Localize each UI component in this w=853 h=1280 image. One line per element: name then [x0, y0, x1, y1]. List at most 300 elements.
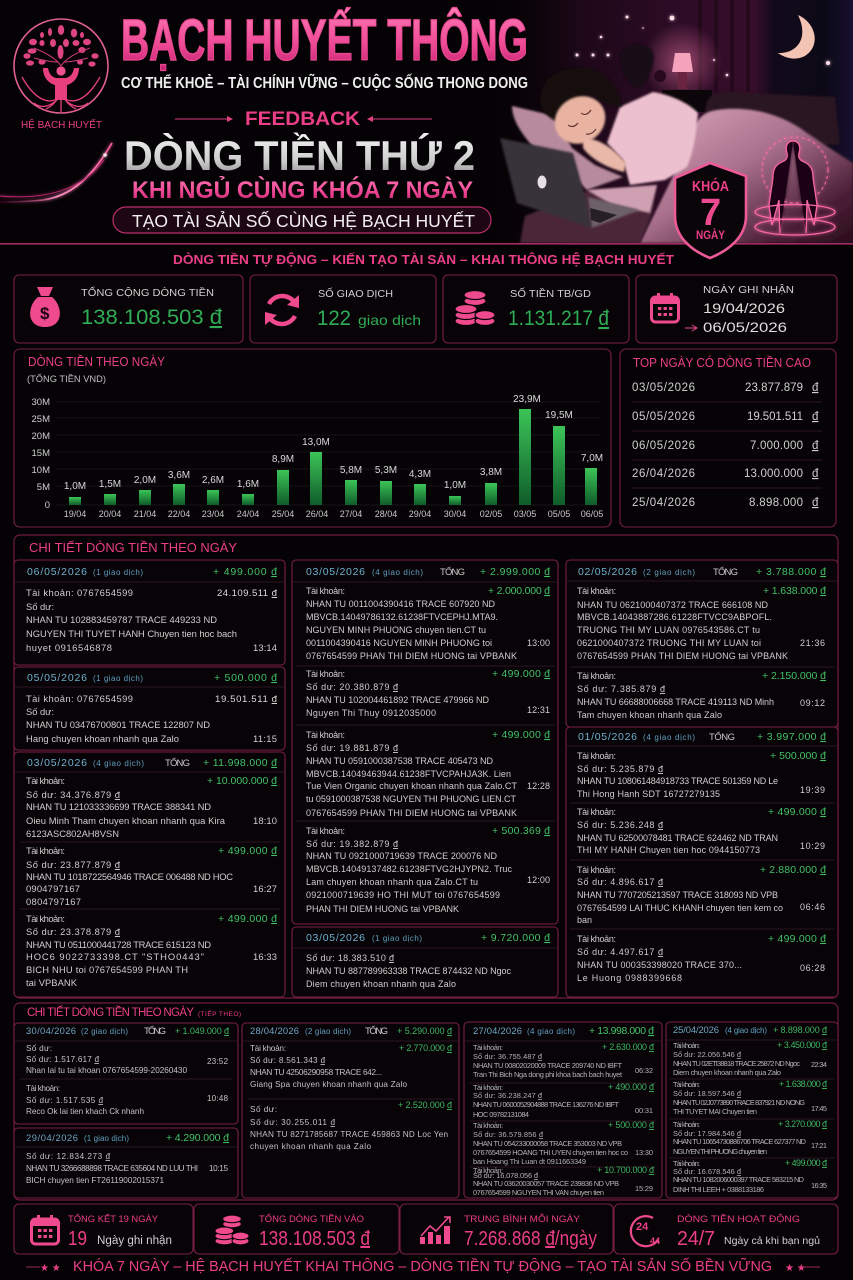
card: 28/04/2026: NHAN TU 8271785687 TRACE 459863 ND Loc Yen [250, 1130, 448, 1139]
badge: 7-day course: NGÀY [696, 227, 725, 242]
card: 02/05/2026: NHAN TU 0621000407372 TRACE 666108 ND [577, 600, 768, 610]
stat card: average per transaction: 1.131.217 đ [508, 307, 609, 330]
card: 28/04/2026: Tài khoản: [250, 1044, 286, 1053]
card: 06/05/2026: 06/05/2026 [27, 566, 87, 578]
panel heading: TOP NGÀY CÓ DÒNG TIỀN CAO [633, 355, 811, 370]
card: 25/04/2026: NHAN TU 02J0773890 TRACE 837921 ND NONG [673, 1098, 805, 1107]
ranked rows: đ [812, 440, 819, 452]
stat card: total cash flow: TỔNG CỘNG DÒNG TIỀN [81, 286, 214, 299]
card: 01/05/2026: Thi Hong Hanh SDT 16727279135 [577, 789, 720, 799]
ranked rows: 7.000.000 [750, 440, 803, 452]
y axis: 25M [32, 414, 50, 425]
card: 03/05/2026, second list: 03/05/2026 [306, 566, 365, 578]
card: 30/04/2026: 30/04/2026 [26, 1025, 76, 1036]
card: 28/04/2026: + 2.520.000 đ [398, 1100, 452, 1110]
card: 03/05/2026, second list: + 499.000 đ [492, 729, 550, 741]
card: 03/05/2026, second list: PHAN THI DIEM HUONG tai VPBANK [306, 904, 459, 914]
icon: glowing body figure [755, 137, 835, 235]
card: 06/05/2026: + 499.000 đ [213, 566, 277, 578]
card: 02/05/2026: 21:36 [800, 638, 825, 648]
card: 27/04/2026: + 13.998.000 đ [589, 1025, 654, 1037]
card: 01/05/2026: THI MY HANH Chuyen tien hoc 0944150773 [577, 845, 760, 855]
title: BẠCH HUYẾT THÔNG [121, 8, 528, 73]
card: 06/05/2026: 13:14 [253, 642, 277, 653]
stat card: total cash flow: 138.108.503 đ [81, 306, 222, 329]
chart title: DÒNG TIỀN THEO NGÀY [28, 354, 166, 369]
card: 27/04/2026: 0767654599 HOANG THI UYEN chuyen tien hoc co [473, 1148, 628, 1157]
card: 30/04/2026: TỔNG [144, 1025, 166, 1037]
card: 01/05/2026: + 2.880.000 đ [760, 864, 826, 876]
bar value labels: 3,6M [168, 470, 190, 481]
card: 27/04/2026: Số dư: 16.078.056 đ [473, 1171, 539, 1180]
card: 28/04/2026: Số dư: [250, 1105, 277, 1114]
icon: coin stacks [215, 1215, 249, 1245]
card: 01/05/2026: TỔNG [709, 731, 735, 743]
ranked rows: đ [812, 468, 819, 480]
card: 03/05/2026, second list: Lam chuyen khoan nhanh qua Zalo.CT tu [306, 877, 478, 887]
x axis labels: 03/05 [514, 509, 536, 519]
x axis labels: 24/04 [237, 509, 259, 519]
card: 25/04/2026: NHAN TU 10654730886706 TRACE 627377 ND [673, 1137, 806, 1146]
card: 03/05/2026, single transaction: + 9.720.000 đ [481, 932, 550, 944]
card: 25/04/2026: + 499.000 đ [785, 1158, 827, 1168]
card: 03/05/2026, four transactions: HOC6 9022733398.CT "STHO0443" [26, 951, 204, 962]
section heading, continued: (TIẾP THEO) [198, 1008, 241, 1018]
card: 02/05/2026 [566, 560, 838, 727]
feedback label with arrows [175, 109, 432, 130]
y axis: 30M [32, 397, 50, 408]
footer slogan: ★ ★ [785, 1263, 806, 1274]
card: 03/05/2026, second list: Tài khoản: [306, 730, 345, 740]
card: 25/04/2026: 25/04/2026 [673, 1024, 719, 1035]
footer card: 19-day summary: 19 [68, 1228, 87, 1250]
card: 03/05/2026, single transaction: Số dư: 18.383.510 đ [306, 953, 394, 963]
badge: 7-day course: 7 [700, 192, 721, 234]
card: 27/04/2026: ban Hoang Thi Luan dt 0911663349 [473, 1157, 586, 1166]
card: 03/05/2026, second list: + 2.000.000 đ [488, 585, 550, 597]
card: 03/05/2026, second list: Tài khoản: [306, 586, 345, 596]
card: 25/04/2026: THI TUYET MAI Chuyen tien [673, 1107, 757, 1116]
card: 03/05/2026, four transactions: NHAN TU 1018722564946 TRACE 006488 ND HOC [26, 871, 233, 882]
bar value labels: 4,3M [409, 469, 431, 480]
card: 05/05/2026 [14, 667, 285, 750]
card: 25/04/2026: NHAN TU 1082006000397 TRACE 583215 ND [673, 1175, 804, 1184]
x axis labels: 05/05 [548, 509, 570, 519]
hero bottom divider [0, 243, 853, 245]
card: 25/04/2026: Số dư: 16.678.546 đ [673, 1167, 742, 1176]
card: 03/05/2026, four transactions: BICH NHU toi 0767654599 PHAN TH [26, 964, 188, 975]
card: 03/05/2026, four transactions: 18:10 [253, 815, 277, 826]
card: 25/04/2026: (4 giao dịch) [725, 1026, 767, 1035]
card: 03/05/2026, single transaction: Diem chuyen khoan nhanh qua Zalo [306, 979, 456, 989]
ranked rows [632, 382, 819, 509]
card: 03/05/2026, second list [292, 560, 558, 924]
card: 27/04/2026: HOC 09782131084 [473, 1110, 529, 1119]
icon: 24 hour cycle: 44 [650, 1236, 660, 1246]
card: 03/05/2026, second list: Tài khoản: [306, 826, 345, 836]
card: 01/05/2026: 0767654599 LAI THUC KHANH chuyen tien kem co [577, 903, 783, 913]
card: 03/05/2026, four transactions: + 11.998.000 đ [203, 757, 277, 769]
card: 27/04/2026: Tài khoản: [473, 1083, 503, 1092]
card: 28/04/2026: NHAN TU 42506290958 TRACE 642... [250, 1068, 382, 1077]
slogan strip: DÒNG TIỀN TỰ ĐỘNG – KIẾN TẠO TÀI SẢN – KHAI THÔNG HỆ BẠCH HUYẾT [173, 252, 674, 267]
card: 05/05/2026: 19.501.511 đ [215, 694, 278, 705]
bar value labels: 7,0M [581, 453, 603, 464]
card: 30/04/2026: (2 giao dịch) [81, 1027, 128, 1036]
y axis: 20M [32, 431, 50, 442]
card: 03/05/2026, four transactions: 0904797167 [26, 883, 80, 894]
card: 02/05/2026: (2 giao dịch) [643, 568, 695, 577]
card: 01/05/2026: ban [577, 915, 592, 925]
card: 06/05/2026: 24.109.511 đ [217, 588, 278, 599]
card: 03/05/2026, second list: 0011004390416 NGUYEN MINH PHUONG toi [306, 638, 492, 648]
card: 27/04/2026: Số dư: 36.238.247 đ [473, 1091, 543, 1100]
card: 03/05/2026, second list: + 499.000 đ [492, 668, 550, 680]
card: 25/04/2026: Số dư: 22.056.546 đ [673, 1050, 742, 1059]
card: 05/05/2026: 11:15 [253, 733, 277, 744]
bar value labels: 1,6M [237, 479, 259, 490]
card: 03/05/2026, four transactions: 16:33 [253, 951, 277, 962]
x axis labels: 25/04 [272, 509, 294, 519]
card: 03/05/2026, second list: NGUYEN MINH PHUONG chuyen tien.CT tu [306, 625, 486, 635]
card: 03/05/2026, four transactions: + 499.000 đ [218, 845, 277, 857]
x axis labels: 29/04 [409, 509, 431, 519]
card: 30/04/2026: 23:52 [207, 1057, 228, 1066]
card: 27/04/2026: NHAN TU 03620030057 TRACE 239836 ND VPB [473, 1179, 619, 1188]
card: 01/05/2026: 06:46 [800, 902, 825, 912]
stat card: transaction count: 122 [317, 307, 351, 330]
icon: growth chart [420, 1217, 450, 1244]
footer card: 19-day summary: TỔNG KẾT 19 NGÀY [68, 1213, 159, 1225]
card: 25/04/2026: Số dư: 17.984.546 đ [673, 1129, 742, 1138]
card: 01/05/2026: 10:29 [800, 841, 825, 851]
icon: 24 hour cycle: 24 [636, 1221, 649, 1233]
card: 28/04/2026: Số dư: 8.561.343 đ [250, 1056, 325, 1065]
card: 01/05/2026: Số dư: 5.235.879 đ [577, 764, 663, 774]
card: 25/04/2026: DINH THI LEEH + 0388133186 [673, 1185, 764, 1194]
logo caption: HỆ BẠCH HUYẾT [21, 118, 103, 131]
card: 01/05/2026 [566, 727, 838, 997]
card: 30/04/2026: Số dư: 1.517.535 đ [26, 1096, 103, 1105]
bar value labels: 13,0M [302, 437, 330, 448]
bar value labels: 23,9M [513, 394, 541, 405]
card: 30/04/2026: Reco Ok lai tien khach Ck nhanh [26, 1107, 144, 1116]
card: 25/04/2026 [666, 1022, 838, 1198]
bar value labels: 5,8M [340, 465, 362, 476]
card: 02/05/2026: NHAN TU 66688006668 TRACE 419113 ND Minh [577, 697, 774, 707]
card: 30/04/2026 [14, 1023, 238, 1124]
logo: tree of life emblem [14, 19, 108, 113]
card: 01/05/2026: Tài khoản: [577, 751, 616, 761]
card: 29/04/2026: 29/04/2026 [26, 1132, 78, 1143]
x axis labels: 19/04 [64, 509, 86, 519]
card: 02/05/2026: + 3.788.000 đ [756, 566, 826, 578]
card: 03/05/2026, second list: 13:00 [527, 638, 550, 648]
card: 29/04/2026: Số dư: 12.834.273 đ [26, 1152, 110, 1161]
feedback label with arrows: FEEDBACK [245, 109, 360, 130]
footer slogan: KHÓA 7 NGÀY – HỆ BẠCH HUYẾT KHAI THÔNG – DÒNG TIỀN TỰ ĐỘNG – TẠO TÀI SẢN SỐ BỀN VỮNG [73, 1257, 772, 1275]
card: 03/05/2026, four transactions: 6123ASC802AH8VSN [26, 828, 119, 839]
card: 30/04/2026: + 1.049.000 đ [175, 1026, 229, 1036]
card: 03/05/2026, second list: NHAN TU 0921000719639 TRACE 200076 ND [306, 851, 498, 861]
card: 03/05/2026, second list: 0767654599 PHAN THI DIEM HUONG tai VPBANK [306, 651, 517, 661]
card: 28/04/2026 [242, 1023, 459, 1198]
card: 02/05/2026: Tài khoản: [577, 671, 616, 681]
card: 03/05/2026, second list: + 2.999.000 đ [480, 566, 550, 578]
card: 27/04/2026: + 490.000 đ [608, 1082, 654, 1092]
card: 03/05/2026, second list: MBVCB.14049786132.61238FTVCEPHJ.MTA9. [306, 612, 498, 622]
card: 28/04/2026: chuyen khoan nhanh qua Zalo [250, 1142, 371, 1151]
y axis: 5M [37, 482, 50, 493]
card: 05/05/2026: NHAN TU 03476700801 TRACE 122807 ND [26, 719, 210, 730]
card: 02/05/2026: 02/05/2026 [578, 566, 637, 578]
card: 01/05/2026: Số dư: 4.497.617 đ [577, 947, 663, 957]
card: 03/05/2026, second list: (4 giao dịch) [372, 568, 423, 577]
card: 01/05/2026: NHAN TU 62500078481 TRACE 624462 ND TRAN [577, 833, 778, 843]
ranked rows: 03/05/2026 [632, 382, 695, 394]
y axis: 15M [32, 448, 50, 459]
card: 03/05/2026, second list: Tài khoản: [306, 669, 345, 679]
card: 01/05/2026: + 499.000 đ [768, 806, 826, 818]
bar value labels: 3,8M [480, 467, 502, 478]
card: 03/05/2026, four transactions: + 499.000 đ [218, 913, 277, 925]
card: 03/05/2026, second list: MBVCB.14049463944.61238FTVCPAHJA3K. Lien [306, 769, 511, 779]
card: 03/05/2026, four transactions: NHAN TU 0511000441728 TRACE 615123 ND [26, 939, 211, 950]
card: 29/04/2026: 10:15 [209, 1164, 228, 1173]
card: 01/05/2026: Tài khoản: [577, 934, 616, 944]
stat card: recording dates [636, 275, 837, 343]
ranked rows: 19.501.511 [747, 411, 803, 423]
card: 27/04/2026: Số dư: 36.755.487 đ [473, 1052, 543, 1061]
card: 27/04/2026: 27/04/2026 [473, 1025, 522, 1036]
card: 27/04/2026: NHAN TU 054233000058 TRACE 353003 ND VPB [473, 1139, 622, 1148]
card: 01/05/2026: + 3.997.000 đ [757, 731, 826, 743]
card: 30/04/2026: Tài khoản: [26, 1084, 60, 1093]
card: 02/05/2026: 0621000407372 TRUONG THI MY LUAN toi [577, 638, 761, 648]
icon: cycle arrows [265, 295, 299, 325]
card: 28/04/2026: Giang Spa chuyen khoan nhanh qua Zalo [250, 1080, 407, 1089]
card: 27/04/2026: Số dư: 36.579.856 đ [473, 1130, 544, 1139]
card: 03/05/2026, second list: NHAN TU 0591000387538 TRACE 405473 ND [306, 756, 494, 766]
card: 25/04/2026: Số dư: 18.597.546 đ [673, 1089, 742, 1098]
pill: create digital assets: TẠO TÀI SẢN SỐ CÙNG HỆ BẠCH HUYẾT [132, 210, 475, 231]
section: daily cash flow details, continued [14, 1003, 838, 1200]
ranked rows: 06/05/2026 [632, 440, 695, 452]
x axis labels: 26/04 [306, 509, 328, 519]
card: 02/05/2026: + 2.150.000 đ [762, 670, 826, 682]
card: 28/04/2026: TỔNG [365, 1025, 388, 1037]
card: 29/04/2026: BICH chuyen tien FT26119002015371 [26, 1176, 164, 1185]
x axis labels: 27/04 [340, 509, 362, 519]
card: 01/05/2026: NHAN TU 108061484918733 TRACE 501359 ND Le [577, 776, 778, 786]
pill: create digital assets [113, 207, 491, 233]
card: 02/05/2026: 0767654599 PHAN THI DIEM HUONG tai VPBANK [577, 651, 788, 661]
card: 05/05/2026: Tài khoản: 0767654599 [26, 693, 133, 704]
card: 03/05/2026, second list: TỔNG [440, 566, 465, 578]
icon: money bag: $ [40, 304, 50, 323]
ranked rows: đ [812, 497, 819, 509]
card: 02/05/2026: MBVCB.14043887286.61228FTVCC9ABPOFL. [577, 612, 772, 622]
ranked rows: 26/04/2026 [632, 468, 695, 480]
ranked rows: 05/05/2026 [632, 411, 695, 423]
footer card: 19-day summary [14, 1204, 193, 1254]
card: 03/05/2026, four transactions: NHAN TU 121033336699 TRACE 388341 ND [26, 801, 211, 812]
x axis labels: 20/04 [99, 509, 121, 519]
icon: calendar [32, 1215, 58, 1244]
ranked rows: 25/04/2026 [632, 497, 695, 509]
card: 03/05/2026, second list: 12:28 [527, 781, 550, 791]
stat card: recording dates: 06/05/2026 [703, 319, 787, 335]
headline: second cash flow: DÒNG TIỀN THỨ 2 [124, 131, 475, 179]
card: 03/05/2026, second list: 0921000719639 HO THI MUT toi 0767654599 [306, 890, 500, 900]
card: 30/04/2026: 10:48 [207, 1094, 228, 1103]
card: 25/04/2026: + 1.638.000 đ [779, 1079, 827, 1089]
footer card: total inflow: TỔNG DÒNG TIỀN VÀO [259, 1213, 364, 1225]
card: 28/04/2026: + 5.290.000 đ [397, 1026, 452, 1036]
card: 25/04/2026: Tài khoản: [673, 1041, 700, 1050]
card: 05/05/2026: (1 giao dịch) [93, 674, 143, 683]
badge: 7-day course [675, 163, 746, 258]
card: 02/05/2026: Tài khoản: [577, 586, 616, 596]
bar value labels: 2,0M [134, 475, 156, 486]
card: 25/04/2026: 17:45 [811, 1104, 827, 1113]
card: 03/05/2026, four transactions: Oieu Minh Tham chuyen khoan nhanh qua Kira [26, 815, 226, 826]
card: 01/05/2026: NHAN TU 000353398020 TRACE 370... [577, 960, 742, 970]
card: 02/05/2026: 09:12 [800, 698, 825, 708]
card: 06/05/2026 [14, 560, 285, 665]
card: 29/04/2026: NHAN TU 3266688898 TRACE 635604 ND LUU THI [26, 1164, 198, 1173]
card: 27/04/2026: 0767654599 NGUYEN THI VAN chuyen tien [473, 1188, 604, 1197]
card: 27/04/2026: + 10.700.000 đ [597, 1165, 654, 1175]
card: 06/05/2026: (1 giao dịch) [93, 568, 143, 577]
card: 02/05/2026: + 1.638.000 đ [763, 585, 826, 597]
x axis labels: 21/04 [134, 509, 156, 519]
panel: daily cash flow bar chart [14, 349, 611, 527]
card: 03/05/2026, four transactions: Tài khoản: [26, 913, 65, 924]
card: 25/04/2026: 16:35 [811, 1181, 827, 1190]
card: 01/05/2026: Số dư: 4.896.617 đ [577, 877, 663, 887]
card: 03/05/2026, four transactions: Số dư: 23.877.879 đ [26, 859, 121, 870]
stat card: transaction count: SỐ GIAO DỊCH [318, 286, 393, 300]
card: 29/04/2026: + 4.290.000 đ [166, 1132, 229, 1144]
card: 28/04/2026: 28/04/2026 [250, 1025, 299, 1036]
card: 29/04/2026 [14, 1128, 238, 1198]
card: 27/04/2026 [464, 1022, 662, 1198]
bar value labels: 19,5M [545, 410, 573, 421]
card: 01/05/2026: 01/05/2026 [578, 731, 637, 743]
card: 25/04/2026: NGUYEN THI PHUONG chuyen tien [673, 1147, 767, 1156]
card: 01/05/2026: Tài khoản: [577, 865, 616, 875]
card: 05/05/2026: Số dư: [26, 706, 54, 717]
card: 01/05/2026: Số dư: 5.236.248 đ [577, 820, 663, 830]
footer card: average per day: 7.268.868 đ/ngày [464, 1228, 597, 1250]
stat card: recording dates: 19/04/2026 [703, 300, 785, 316]
card: 25/04/2026: NHAN TU 02ETI38818 TRACE 25872 ND Ngoc [673, 1059, 800, 1068]
bar value labels: 1,0M [64, 481, 86, 492]
y axis [32, 397, 50, 511]
stat card: transaction count: giao dịch [358, 312, 421, 328]
card: 01/05/2026: Tài khoản: [577, 807, 616, 817]
card: 02/05/2026: TỔNG [713, 566, 738, 578]
bars [69, 409, 597, 505]
card: 01/05/2026: (4 giao dịch) [643, 733, 695, 742]
card: 01/05/2026: 19:39 [800, 785, 825, 795]
card: 03/05/2026, four transactions: Số dư: 34.376.879 đ [26, 789, 121, 800]
card: 03/05/2026, single transaction: 03/05/2026 [306, 932, 365, 944]
bar value labels: 8,9M [272, 454, 294, 465]
card: 29/04/2026: (1 giao dịch) [84, 1134, 129, 1143]
card: 27/04/2026: 06:32 [635, 1066, 653, 1075]
ranked rows: đ [812, 382, 819, 394]
card: 28/04/2026: (2 giao dịch) [305, 1027, 351, 1036]
card: 03/05/2026, four transactions: 03/05/2026 [27, 757, 87, 769]
icon: calendar [652, 293, 678, 322]
card: 28/04/2026: + 2.770.000 đ [399, 1043, 452, 1053]
footer card: total inflow: 138.108.503 đ [259, 1228, 371, 1250]
section heading, continued: CHI TIẾT DÒNG TIỀN THEO NGÀY [27, 1006, 194, 1019]
card: 27/04/2026: Tài khoản: [473, 1166, 503, 1175]
card: 05/05/2026: 05/05/2026 [27, 672, 87, 684]
x axis labels: 28/04 [375, 509, 397, 519]
card: 27/04/2026: NHAN TU 0600052904888 TRACE 136276 ND IBFT [473, 1100, 619, 1109]
card: 25/04/2026: + 3.450.000 đ [777, 1040, 827, 1050]
card: 01/05/2026: Le Huong 0988399668 [577, 973, 682, 983]
ranked rows: đ [812, 411, 819, 423]
icon: 24 hour cycle [631, 1216, 660, 1246]
panel: top cash flow days [620, 349, 836, 527]
card: 01/05/2026: 06:28 [800, 963, 825, 973]
card: 05/05/2026: Hang chuyen khoan nhanh qua Zalo [26, 733, 179, 744]
card: 05/05/2026: + 500.000 đ [214, 672, 277, 684]
footer card: always active: 24/7 [677, 1228, 715, 1250]
card: 03/05/2026, second list: 12:00 [527, 875, 550, 885]
card: 06/05/2026: NHAN TU 102883459787 TRACE 449233 ND [26, 614, 217, 625]
card: 27/04/2026: + 500.000 đ [608, 1120, 654, 1130]
footer card: always active [614, 1204, 838, 1254]
left light swoosh [0, 143, 112, 202]
card: 03/05/2026, second list: 12:31 [527, 705, 550, 715]
card: 03/05/2026, four transactions: Tài khoản: [26, 845, 65, 856]
card: 27/04/2026: 00:31 [635, 1106, 653, 1115]
card: 03/05/2026, four transactions: 16:27 [253, 883, 277, 894]
card: 30/04/2026: Nhan lai tu tai khoan 0767654599-20260430 [26, 1066, 187, 1075]
card: 03/05/2026, second list: NHAN TU 102004461892 TRACE 479966 ND [306, 695, 490, 705]
card: 06/05/2026: NGUYEN THI TUYET HANH Chuyen tien hoc bach [26, 628, 237, 639]
ranked rows: 13.000.000 [744, 468, 803, 480]
x axis labels: 23/04 [202, 509, 224, 519]
card: 28/04/2026: Số dư: 30.255.011 đ [250, 1118, 335, 1127]
stat card: transaction count [250, 275, 436, 343]
card: 03/05/2026, four transactions: (4 giao dịch) [93, 759, 144, 768]
bar value labels: 2,6M [202, 475, 224, 486]
ranked rows: 8.898.000 [749, 497, 803, 509]
card: 01/05/2026: + 499.000 đ [768, 933, 826, 945]
x axis labels: 06/05 [581, 509, 603, 519]
card: 03/05/2026, single transaction: (1 giao dịch) [372, 934, 422, 943]
card: 25/04/2026: Tài khoản: [673, 1080, 700, 1089]
x axis labels [64, 509, 603, 519]
footer card: 19-day summary: Ngày ghi nhận [97, 1235, 172, 1247]
card: 03/05/2026, four transactions: + 10.000.000 đ [207, 775, 277, 787]
x axis labels: 30/04 [444, 509, 466, 519]
card: 03/05/2026, four transactions: 0804797167 [26, 896, 81, 907]
card: 03/05/2026, second list: Tue Vien Organic chuyen khoan nhanh qua Zalo.CT [306, 781, 518, 791]
footer card: total inflow [194, 1204, 399, 1254]
section heading: CHI TIẾT DÒNG TIỀN THEO NGÀY [29, 540, 238, 555]
y axis: 0 [45, 500, 50, 511]
card: 30/04/2026: Số dư: 1.517.617 đ [26, 1055, 99, 1064]
card: 02/05/2026: Số dư: 7.385.879 đ [577, 684, 665, 694]
